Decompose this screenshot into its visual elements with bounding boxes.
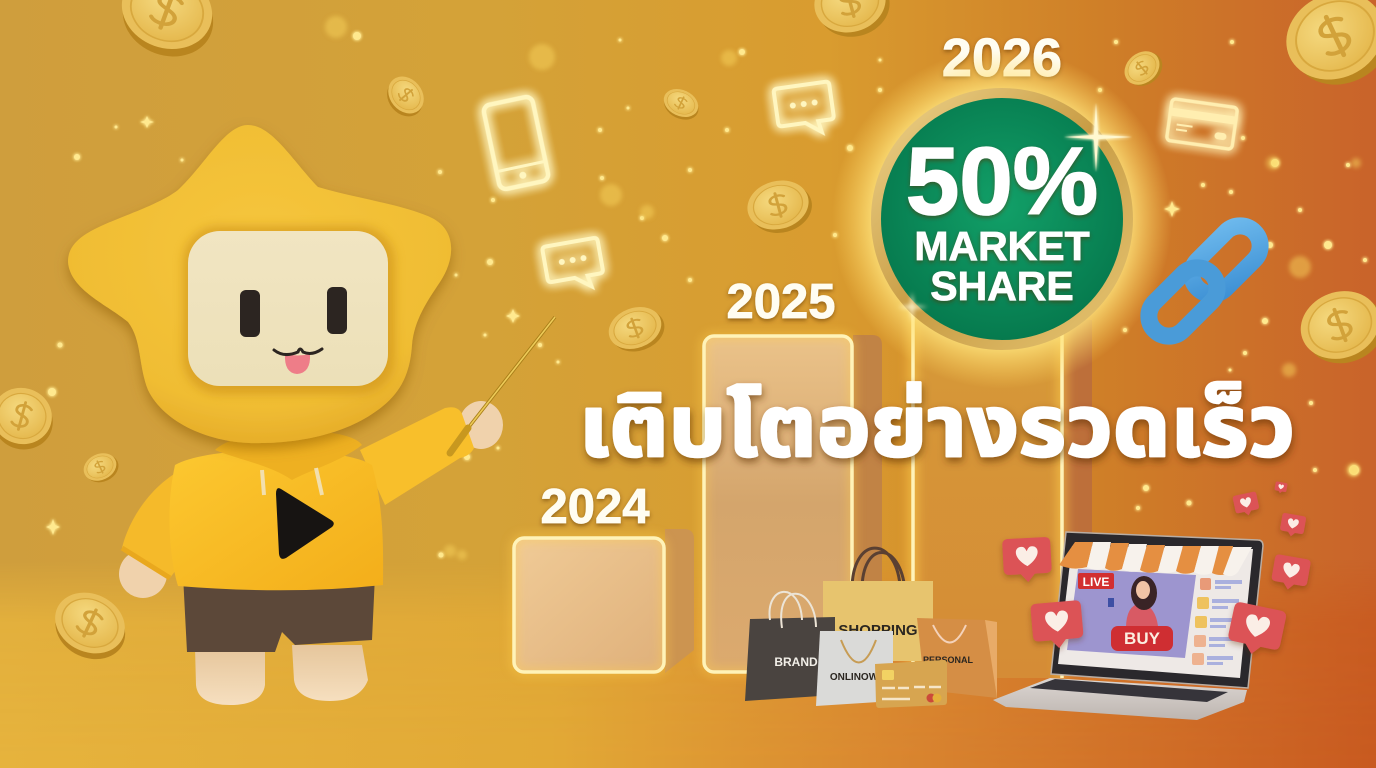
bar 2026 [913,300,1092,678]
label: 2024: 2024 [540,480,650,534]
star head [68,125,451,443]
black brand bag [745,592,835,701]
leg right [292,645,368,701]
badge value: 50% [906,128,1098,235]
orange bag [917,618,997,698]
sparkles and bokeh [46,32,1367,558]
icon: play triangle [276,488,334,559]
shopping bags [745,548,997,708]
pointer stick [450,317,555,453]
label: 2026: 2026 [942,28,1062,88]
icon: blue chain link [1141,218,1268,344]
coin: near card [1118,43,1169,94]
like bubble: left top [1002,537,1052,583]
upper link [1184,218,1268,302]
left hand [119,550,167,598]
laptop base [993,678,1247,720]
like bubble: right middle [1270,554,1311,593]
live tag [1078,573,1114,589]
like bubble: smallest [1274,481,1288,494]
badge sparkle bottom left [898,292,928,322]
live tag: LIVE [1083,575,1109,589]
yellow shopping bag [823,581,933,661]
badge: 50% market share [832,49,1172,389]
buy button [1111,626,1173,651]
coin: left edge [0,381,60,456]
icon: neon phone [483,96,549,190]
icon: neon chat bubble lower [542,237,605,293]
badge sparkle top right [1064,103,1132,172]
label: 2025: 2025 [726,275,836,329]
tongue [285,354,310,374]
like bubbles [1002,481,1311,659]
white online bag [816,631,893,706]
right eye [327,287,347,334]
like bubble: right upper [1279,513,1306,538]
coin: near pointer [603,299,670,359]
like bubble: right lower [1225,601,1287,659]
badge label: market: MARKET [914,223,1090,269]
like bubble: left lower [1030,600,1084,650]
title: เติบโตอย่างรวดเร็ว [579,379,1295,475]
coin: top right [1272,0,1376,102]
left cuff [122,548,170,578]
bar 2024 [513,529,694,673]
yellow shopping bag: SHOPPING [838,622,918,639]
shorts [183,575,375,652]
hood collar [215,431,362,480]
laptop with live shop [993,532,1263,720]
right hand [459,401,503,449]
hoodie strings [262,468,322,495]
lower link [1141,260,1225,344]
hoodie body [169,450,383,590]
like bubble: top [1232,491,1260,518]
soft bokeh circles [325,16,1361,560]
icon: neon credit card [1166,99,1238,149]
yellow bag handles [852,548,905,590]
coin: right edge [1291,279,1376,375]
left arm [122,468,205,578]
coin: top left [109,0,226,69]
gold credit card [875,660,947,708]
left eye [240,290,260,337]
orange bag: PERSONAL [923,655,974,665]
video panel [1067,569,1196,658]
right arm [360,407,474,505]
badge label: share: SHARE [930,263,1074,309]
black brand bag: BRAND [774,655,818,669]
keyboard [1030,679,1228,702]
leg left [195,648,265,705]
presenter [1126,576,1158,628]
face inner shadow [183,226,395,394]
buy button: BUY [1124,629,1161,648]
coin: small left [79,447,123,488]
product box [1108,598,1114,607]
white online bag: ONLINOW [830,672,879,683]
face panel [188,231,388,386]
side list [1192,578,1242,665]
screen [1058,546,1253,678]
screen bezel [1051,532,1263,688]
coin: above phone [379,69,432,124]
coin: top centre [807,0,897,45]
icon: neon chat bubble top [773,81,836,138]
character: star mascot [68,125,555,705]
coin: centre top [658,84,704,125]
mouth [274,349,322,355]
coin: lower left [43,582,137,670]
bar 2025 [703,335,882,673]
awning [1059,542,1252,576]
coin: centre [742,173,817,240]
